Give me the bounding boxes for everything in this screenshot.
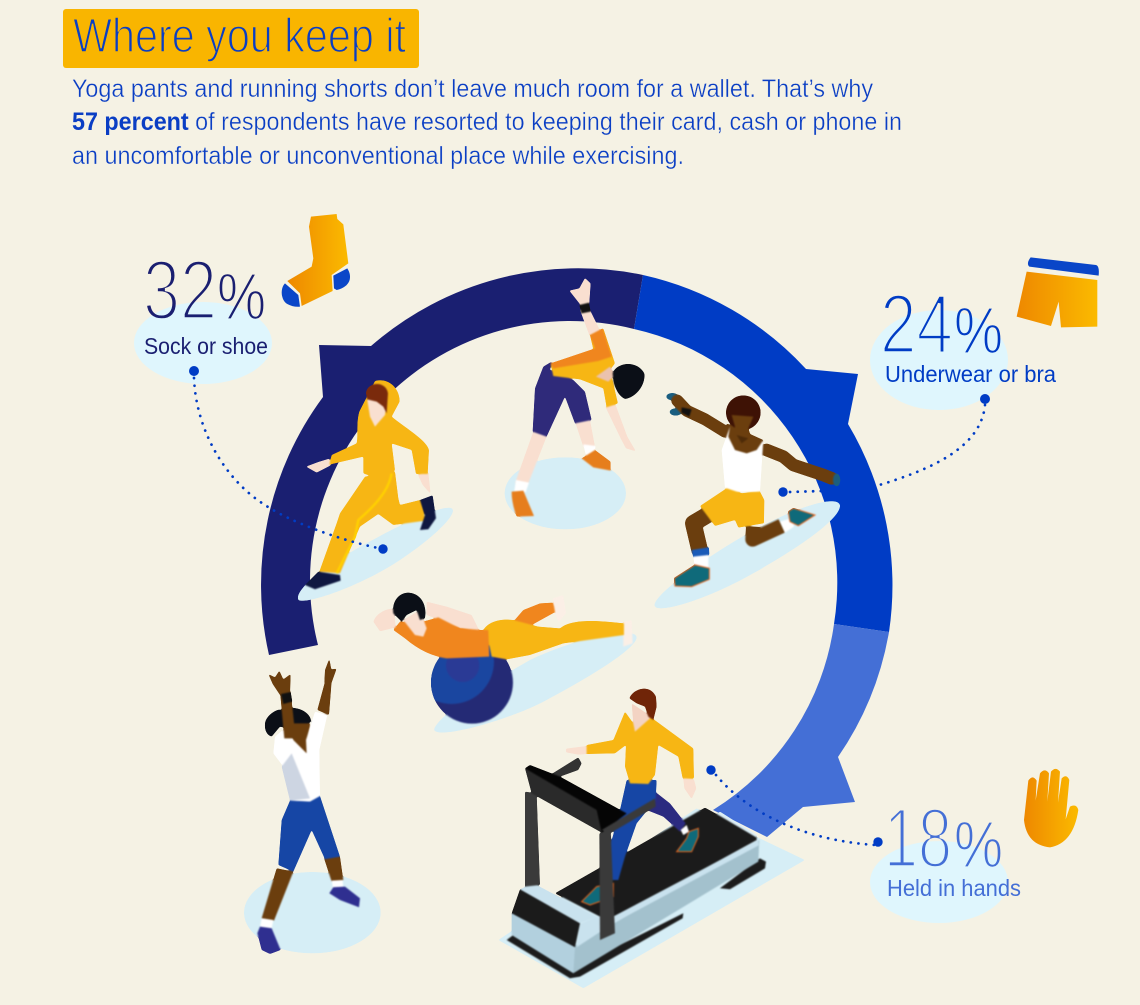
ring segment: sock or shoe 32% xyxy=(261,268,643,655)
ring segment: held in hands 18% xyxy=(713,624,889,837)
callout: 18% held in hands xyxy=(870,791,1021,923)
intro text block: 57 percent of respondents have resorted to keeping their card, cash or phone in xyxy=(72,108,902,136)
icon: sock xyxy=(282,214,350,307)
figure: person bending sideways in orange and yellow top xyxy=(505,278,644,529)
callout: 24% underwear or bra: Underwear or bra xyxy=(885,361,1056,387)
icon: shorts xyxy=(1017,257,1099,327)
leader dot: underwear or bra target xyxy=(778,487,788,497)
title: Where you keep it xyxy=(73,10,406,63)
intro text block: Yoga pants and running shorts don’t leave much room for a wallet. That’s why xyxy=(72,75,873,103)
treadmill console and front upright xyxy=(525,757,656,940)
callout: 32% sock or shoe xyxy=(134,243,272,384)
dotted leader: sock or shoe xyxy=(194,378,378,548)
runner xyxy=(566,689,698,905)
callout: 18% held in hands: Held in hands xyxy=(887,875,1021,901)
leader dot: held in hands xyxy=(873,837,883,847)
icon: hand xyxy=(1024,769,1078,847)
ring chart xyxy=(261,268,892,837)
figure: person with arms raised xyxy=(244,659,381,954)
callout: 32% sock or shoe: % xyxy=(217,259,266,333)
leader dot: sock or shoe xyxy=(189,366,199,376)
callout: 24% underwear or bra: % xyxy=(954,293,1003,367)
treadmill xyxy=(507,808,766,978)
dotted leader: underwear or bra, inner xyxy=(790,491,822,492)
leader dot: held in hands target xyxy=(706,765,716,775)
figure: lunging person in yellow hoodie xyxy=(298,380,453,601)
intro text block: an uncomfortable or unconventional place while exercising. xyxy=(72,142,684,170)
figure: runner on treadmill xyxy=(498,689,805,988)
treadmill mat xyxy=(498,808,805,988)
intro text block xyxy=(72,75,902,170)
exercise ball xyxy=(431,644,514,725)
leader dot: sock or shoe target xyxy=(378,544,388,554)
dotted leader: underwear or bra, outer xyxy=(876,405,985,486)
callout: 18% held in hands: % xyxy=(954,807,1003,881)
figure: person on exercise ball xyxy=(373,593,637,733)
callout: 24% underwear or bra xyxy=(870,277,1056,410)
callout: 18% held in hands: 18 xyxy=(884,791,952,885)
callout: 32% sock or shoe: 32 xyxy=(143,243,217,337)
figure: dark-skinned person lunging with dumbbells xyxy=(655,393,840,608)
dotted leader: held in hands xyxy=(716,775,875,845)
callout: 24% underwear or bra: 24 xyxy=(880,277,953,371)
ring segment: underwear or bra 24% xyxy=(634,275,892,632)
leader dot: underwear or bra xyxy=(980,394,990,404)
callout: 32% sock or shoe: Sock or shoe xyxy=(144,333,268,359)
